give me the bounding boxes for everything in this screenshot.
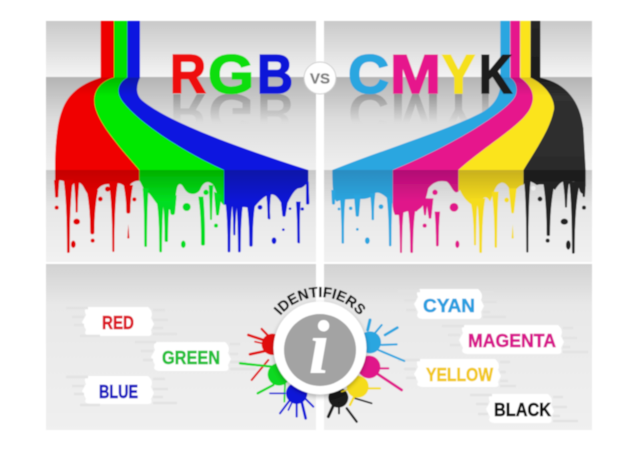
label: BLUE: BLUE bbox=[99, 382, 138, 402]
info badge bbox=[273, 302, 367, 397]
title reflection bbox=[170, 82, 512, 144]
title reflection: B bbox=[257, 82, 293, 144]
red splat bbox=[248, 329, 283, 380]
panel: right background bbox=[324, 21, 592, 430]
cyan splat bbox=[359, 320, 404, 361]
label: CYAN: CYAN bbox=[423, 296, 475, 316]
black paint stream bbox=[523, 21, 586, 254]
yellow splat bbox=[342, 376, 380, 405]
title reflection: R bbox=[170, 82, 206, 144]
panel: left background bbox=[46, 21, 316, 430]
label: CYAN bbox=[398, 289, 506, 319]
label: GREEN bbox=[135, 342, 256, 371]
label: YELLOW bbox=[398, 359, 516, 387]
vs badge bbox=[304, 62, 336, 94]
blue splat bbox=[270, 383, 313, 418]
vs badge: VS bbox=[310, 70, 330, 88]
label: BLACK: BLACK bbox=[494, 400, 551, 420]
green paint stream bbox=[94, 21, 224, 252]
title: RGB: G bbox=[208, 43, 254, 105]
title: CMYK: M bbox=[390, 43, 441, 105]
title reflection: C bbox=[348, 82, 389, 144]
paint: CMYK streams and drips bbox=[331, 21, 586, 254]
label: YELLOW: YELLOW bbox=[426, 365, 493, 385]
cyan paint stream bbox=[331, 21, 517, 246]
icon: italic i: i bbox=[308, 306, 330, 390]
green splat bbox=[240, 363, 290, 402]
title: CMYK bbox=[348, 43, 475, 105]
magenta paint stream bbox=[393, 21, 533, 253]
title: RGB: B bbox=[257, 43, 293, 105]
label: GREEN: GREEN bbox=[162, 348, 220, 368]
title reflection: K bbox=[479, 82, 512, 144]
label: BLUE bbox=[66, 376, 177, 405]
black splat bbox=[328, 388, 372, 422]
title: RGB: R bbox=[170, 43, 206, 105]
red paint stream bbox=[54, 21, 139, 253]
label: BLACK bbox=[470, 394, 578, 423]
magenta splat bbox=[358, 356, 402, 390]
icon: paint splatters bbox=[240, 320, 404, 422]
blue paint stream bbox=[119, 21, 309, 252]
title reflection: G bbox=[208, 82, 254, 144]
heading: IDENTIFIERS: IDENTIFIERS bbox=[273, 286, 366, 316]
yellow paint stream bbox=[458, 21, 554, 253]
label: MAGENTA: MAGENTA bbox=[468, 331, 556, 351]
title reflection: Y bbox=[442, 82, 475, 144]
label: MAGENTA bbox=[442, 325, 588, 354]
label: RED bbox=[66, 307, 177, 336]
center divider bbox=[316, 21, 324, 430]
title: CMYK: C bbox=[348, 43, 389, 105]
title reflection: M bbox=[390, 82, 441, 144]
label: RED: RED bbox=[102, 313, 134, 333]
paint: RGB streams and drips bbox=[54, 21, 309, 253]
title: RGB bbox=[170, 43, 293, 105]
title: CMYK: Y bbox=[442, 43, 475, 105]
title: K of CMYK: K bbox=[479, 43, 512, 105]
